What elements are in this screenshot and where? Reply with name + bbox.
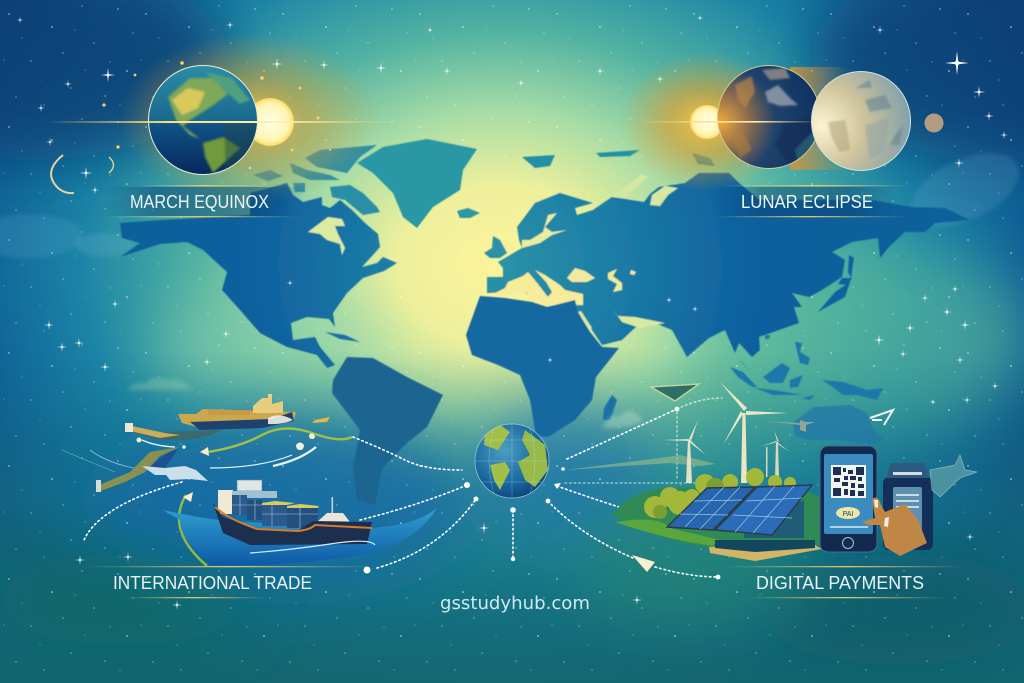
water swoosh — [163, 508, 437, 565]
clouds — [127, 378, 193, 390]
ship superstructure — [218, 480, 277, 514]
sun glow — [620, 52, 790, 192]
sun — [690, 105, 724, 139]
pay button: PAI — [843, 511, 853, 518]
crescent moon and star ornaments — [51, 155, 114, 193]
route markers — [546, 407, 720, 579]
dotted trade routes — [84, 437, 513, 568]
clouds — [603, 411, 643, 428]
Mediterranean Sea — [493, 270, 583, 305]
white motion strokes — [62, 440, 316, 472]
phone — [820, 446, 877, 552]
large turbine — [720, 382, 788, 483]
medium turbine — [663, 420, 706, 483]
green trade arc with arrow — [200, 428, 352, 456]
Russian coast inlets — [612, 174, 678, 206]
label: Lunar Eclipse: LUNAR ECLIPSE — [741, 192, 873, 212]
Iceland — [457, 208, 480, 218]
dotted routes — [548, 398, 722, 577]
Canadian Arctic islands — [253, 145, 380, 215]
small turbine — [760, 430, 790, 478]
label rules — [105, 185, 295, 217]
wind turbines — [663, 382, 790, 483]
label rules — [715, 185, 912, 217]
South America — [332, 357, 443, 505]
label rules — [725, 566, 965, 598]
big container ship — [213, 480, 375, 553]
solar panels — [667, 485, 812, 535]
tan ribbon — [565, 455, 716, 470]
Baltic Sea — [522, 213, 567, 248]
Madagascar — [603, 395, 617, 420]
trees — [644, 468, 796, 519]
Caribbean islands — [325, 332, 360, 342]
horizontal light flare — [640, 121, 820, 123]
Hudson Bay — [308, 217, 345, 255]
label band — [105, 187, 305, 216]
ship bow deck — [317, 513, 350, 526]
sun — [246, 98, 294, 146]
Arctic Russia islands — [522, 150, 715, 168]
horizontal light flare — [45, 121, 400, 123]
Red Sea and Persian Gulf — [578, 308, 665, 330]
Caspian Sea — [608, 269, 636, 292]
Black Sea — [567, 268, 595, 282]
eclipsed earth — [717, 65, 821, 169]
North America — [120, 183, 397, 368]
curved ribbon vessel — [96, 447, 180, 492]
label band — [715, 187, 895, 216]
white dolphin shape — [142, 466, 208, 481]
Southeast Asia islands — [730, 335, 883, 400]
panel: march equinox — [45, 33, 400, 217]
moon — [811, 71, 911, 171]
United Kingdom — [484, 236, 507, 258]
earth globe — [148, 65, 258, 175]
small plane top right — [870, 410, 893, 425]
website watermark: gsstudyhub.com — [440, 593, 590, 614]
central globe — [475, 424, 549, 498]
faint nebula planets — [0, 138, 1024, 258]
label: March Equinox: MARCH EQUINOX — [130, 192, 269, 212]
small cargo ship — [178, 394, 330, 430]
pointing hand — [862, 497, 927, 556]
label: International Trade: INTERNATIONAL TRADE — [113, 573, 312, 593]
Greenland — [357, 139, 477, 228]
QR code — [831, 465, 866, 498]
Eurasia — [487, 173, 970, 357]
cargo buoys — [136, 433, 315, 450]
route end points — [364, 482, 516, 574]
Africa — [466, 296, 619, 437]
label: Digital Payments: DIGITAL PAYMENTS — [756, 573, 924, 593]
panel: digital payments — [546, 382, 977, 598]
eclipse shadow band — [790, 67, 850, 170]
panel: lunar eclipse — [620, 52, 944, 217]
Japan and Sakhalin — [818, 255, 854, 312]
green arc and arrow to big ship — [179, 492, 207, 566]
triangle marker — [651, 384, 699, 401]
gold sparkles — [102, 61, 331, 169]
drone outline — [930, 455, 977, 497]
Australia — [793, 405, 885, 445]
label rules — [85, 566, 375, 598]
sign on map — [765, 420, 815, 432]
solar panel base — [709, 500, 822, 561]
barge — [125, 423, 223, 440]
green island — [612, 487, 825, 550]
payment terminal — [883, 463, 933, 550]
panel: international trade — [62, 378, 516, 598]
ship hull — [213, 503, 372, 545]
container stacks — [232, 495, 319, 528]
small moon — [924, 114, 944, 132]
sun glow — [120, 33, 380, 203]
world map — [120, 139, 970, 505]
